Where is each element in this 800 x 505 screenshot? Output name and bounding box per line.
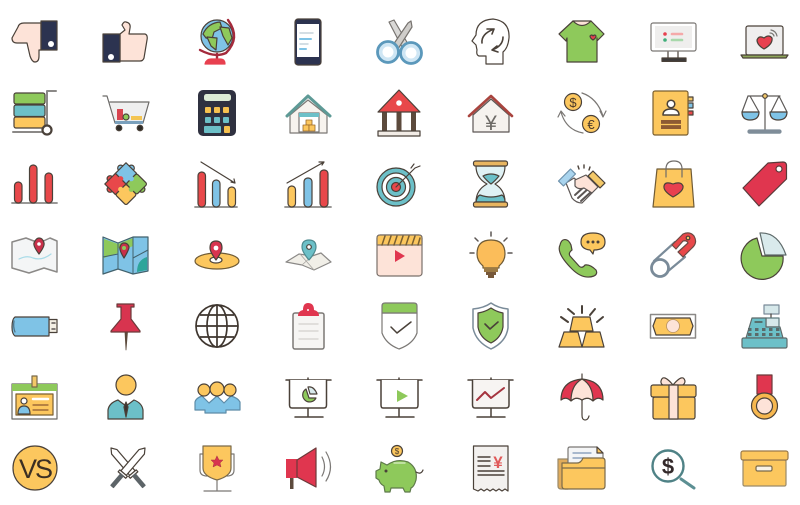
icon: currency exchange: €: [587, 117, 595, 132]
icon: presentation board with play: [377, 378, 422, 417]
icon: security shield: [473, 303, 508, 349]
icon: pie chart: [741, 233, 786, 279]
icon: thumbs up: [103, 22, 147, 62]
icon: scissors: [378, 20, 422, 64]
icon: gold bars: [559, 306, 604, 347]
icon: declining bar chart: [195, 162, 237, 207]
icon: magnifier with dollar: [652, 450, 694, 488]
icon: clipboard: [293, 303, 324, 349]
icon: location pin on ellipse: [195, 241, 239, 269]
icon: VS coin: VS: [19, 454, 52, 484]
icon: piggy bank: $: [395, 447, 400, 456]
icon: price tag: [743, 162, 786, 206]
icon: umbrella: [561, 374, 603, 420]
icon: laptop with heart: [741, 26, 788, 58]
icon: banknote: [650, 314, 696, 338]
icon: stacked goods on hand truck: [13, 91, 56, 134]
icon: businessman: [108, 375, 143, 419]
icon: jigsaw puzzle: [101, 159, 151, 209]
icon: VS coin: [13, 446, 57, 490]
icon: house with yen sign: [469, 96, 512, 135]
icon: piggy bank: [376, 446, 423, 492]
icon: head with arrows: [472, 19, 509, 64]
icon: megaphone: [286, 448, 330, 489]
icon: shopping cart: [103, 96, 149, 131]
icon: push pin: [111, 304, 140, 350]
icon: house with yen sign: ¥: [484, 112, 497, 135]
icon: folder with documents: [558, 447, 605, 489]
icon: coloured folding map: [103, 237, 148, 274]
icon: shopping bag with heart: [653, 161, 694, 207]
icon: balance scales: [742, 94, 787, 133]
icon: presentation board with line chart: [468, 378, 513, 417]
icon: smartphone: [295, 19, 321, 65]
icon: bank building: [378, 90, 420, 136]
icon: desktop monitor: [651, 23, 696, 61]
icon: video clapper: [377, 235, 422, 276]
icon: shield badge with check: [382, 303, 417, 349]
icon: target with arrow: [377, 164, 420, 206]
icon: cash register: [742, 305, 787, 348]
icon: safety pin: [652, 233, 696, 276]
icon: thumbs down: [12, 21, 57, 62]
icon: currency exchange: $: [569, 95, 577, 110]
icon: medal: [752, 375, 778, 419]
icon: globe: [200, 20, 234, 64]
icon: green t-shirt: [559, 21, 604, 62]
icon: paper map with pin: [12, 238, 57, 273]
icon: storage box: [741, 451, 788, 486]
icon: crossed swords: [107, 445, 149, 490]
icon: currency exchange: [558, 93, 606, 133]
icon: light bulb: [470, 232, 512, 278]
icon: red bar chart: [12, 165, 57, 203]
icon: receipt with yen: ¥: [493, 453, 503, 472]
icon: telephone with speech bubble: [559, 233, 605, 277]
icon: group of people: [195, 382, 240, 413]
icon: address book: [653, 91, 693, 135]
icon: magnifier with dollar: $: [662, 454, 674, 479]
icon: presentation board with pie: [286, 378, 331, 417]
icon: receipt with yen: [474, 446, 508, 491]
icon: rising bar chart: [285, 162, 331, 207]
icon: USB drive: [12, 317, 57, 336]
icon: calculator: [198, 90, 236, 136]
icon: warehouse house: [287, 96, 330, 133]
icon: trophy: [200, 446, 234, 491]
icon: flat map with pin: [286, 240, 331, 270]
icon: ID badge: [12, 376, 57, 419]
icon: wire globe: [196, 305, 238, 347]
icon: handshake: [559, 165, 605, 203]
icon: gift box: [651, 378, 696, 419]
icon: hourglass: [474, 161, 508, 207]
